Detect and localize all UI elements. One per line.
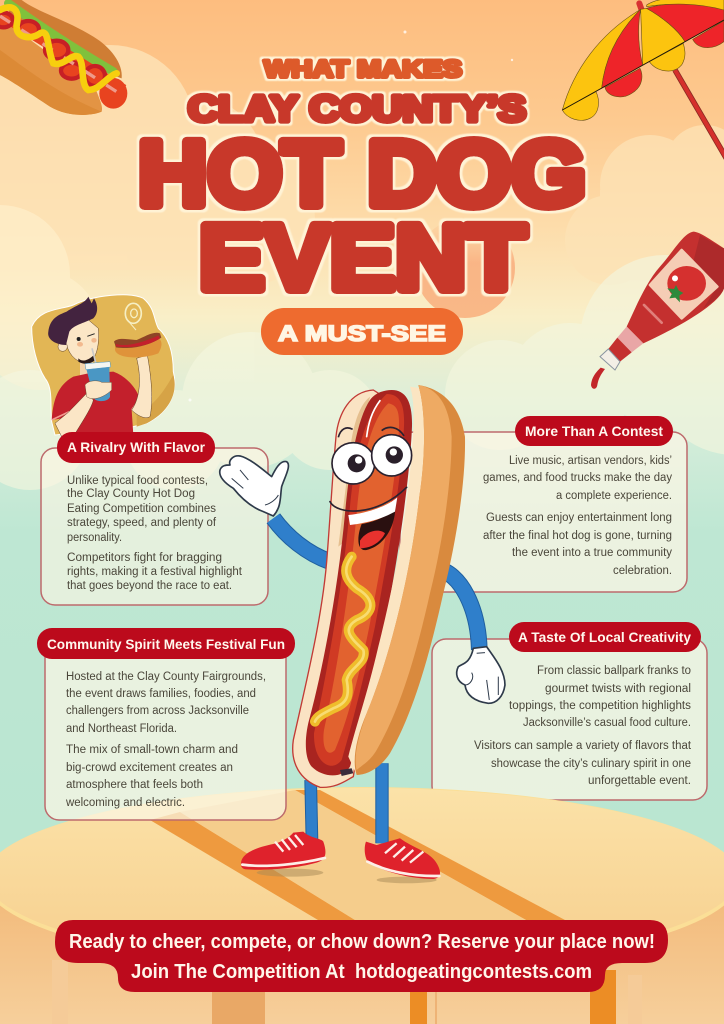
heading pill: [509, 622, 701, 652]
body text: the Clay County Hot Dog: [67, 488, 195, 500]
panel: community spirit meets festival fun: [37, 628, 295, 820]
body text: big-crowd excitement creates an: [66, 762, 233, 774]
body text: Visitors can sample a variety of flavors that: [474, 740, 692, 752]
body text: Live music, artisan vendors, kids’: [509, 455, 672, 467]
title line: hot dog: HOT DOG: [138, 123, 586, 225]
body text: the event draws families, foodies, and: [66, 688, 256, 700]
body text: Unlike typical food contests,: [67, 475, 208, 487]
body text: [483, 455, 672, 577]
table: [0, 787, 724, 1024]
body text: challengers from across Jacksonville: [66, 705, 249, 717]
title line: what makes: WHAT MAKES: [264, 56, 462, 83]
call to action banner: [55, 920, 668, 992]
body text: Jacksonville’s casual food culture.: [523, 717, 691, 729]
panel: a rivalry with flavor: [41, 432, 268, 605]
decoration: hot dog top left: [0, 0, 127, 115]
panel: a taste of local creativity: [432, 622, 707, 800]
mascot bun front: [348, 387, 443, 775]
body text: personality.: [67, 532, 122, 544]
heading pill: [57, 432, 215, 463]
heading pill: [515, 416, 673, 446]
heading pill: A Rivalry With Flavor: [67, 439, 206, 455]
cta line one: Ready to cheer, compete, or chow down? Reserve your place now!: [69, 931, 655, 953]
body text: Eating Competition combines: [67, 503, 216, 515]
heading pill: A Taste Of Local Creativity: [518, 629, 691, 645]
mascot arms: [273, 518, 479, 650]
body text: the event into a true community: [512, 547, 672, 559]
mascot shoes: [241, 832, 440, 883]
body text: gourmet twists with regional: [545, 683, 691, 695]
body text: [67, 475, 243, 592]
title: [138, 56, 586, 309]
badge: a must-see: A MUST-SEE: [278, 321, 446, 346]
body text: celebration.: [613, 565, 672, 577]
panel: more than a contest: [400, 416, 687, 592]
heading pill: More Than A Contest: [525, 423, 663, 439]
title line: clay county's: CLAY COUNTY’S: [188, 88, 526, 129]
body text: Hosted at the Clay County Fairgrounds,: [66, 671, 266, 683]
mascot bun back: [293, 390, 410, 787]
illustration: man eating hot dog: [32, 295, 175, 437]
body text: a complete experience.: [556, 490, 672, 502]
body text: showcase the city’s culinary spirit in one: [491, 758, 691, 770]
body text: atmosphere that feels both: [66, 779, 203, 791]
mascot legs: [311, 763, 382, 843]
decoration: ketchup bottle: [591, 232, 724, 389]
body text: unforgettable event.: [588, 775, 691, 787]
mascot sausage: [306, 390, 412, 775]
title line: event: EVENT: [199, 207, 526, 309]
body text: [474, 665, 692, 787]
heading pill: [37, 628, 295, 659]
body text: From classic ballpark franks to: [537, 665, 691, 677]
body text: Competitors fight for bragging: [67, 552, 222, 564]
heading pill: Community Spirit Meets Festival Fun: [47, 636, 285, 652]
body text: welcoming and electric.: [65, 797, 185, 809]
mascot mustard: [315, 557, 370, 722]
decoration: beach umbrella: [562, 0, 724, 162]
body text: and Northeast Florida.: [66, 723, 177, 735]
mascot face: [330, 427, 412, 550]
body text: Guests can enjoy entertainment long: [486, 512, 672, 524]
body text: after the final hot dog is gone, turning: [483, 530, 672, 542]
illustration: hot dog mascot: [220, 385, 505, 883]
body text: rights, making it a festival highlight: [67, 566, 243, 578]
cta line two: Join The Competition At hotdogeatingcontests.com: [131, 961, 592, 983]
mascot gloves: [220, 456, 505, 703]
body text: toppings, the competition highlights: [509, 700, 691, 712]
body text: [65, 671, 266, 809]
body text: games, and food trucks make the day: [483, 472, 672, 484]
body text: The mix of small-town charm and: [66, 744, 238, 756]
body text: strategy, speed, and plenty of: [67, 517, 217, 529]
body text: that goes beyond the race to eat.: [67, 580, 232, 592]
badge: a must-see: [261, 308, 463, 355]
